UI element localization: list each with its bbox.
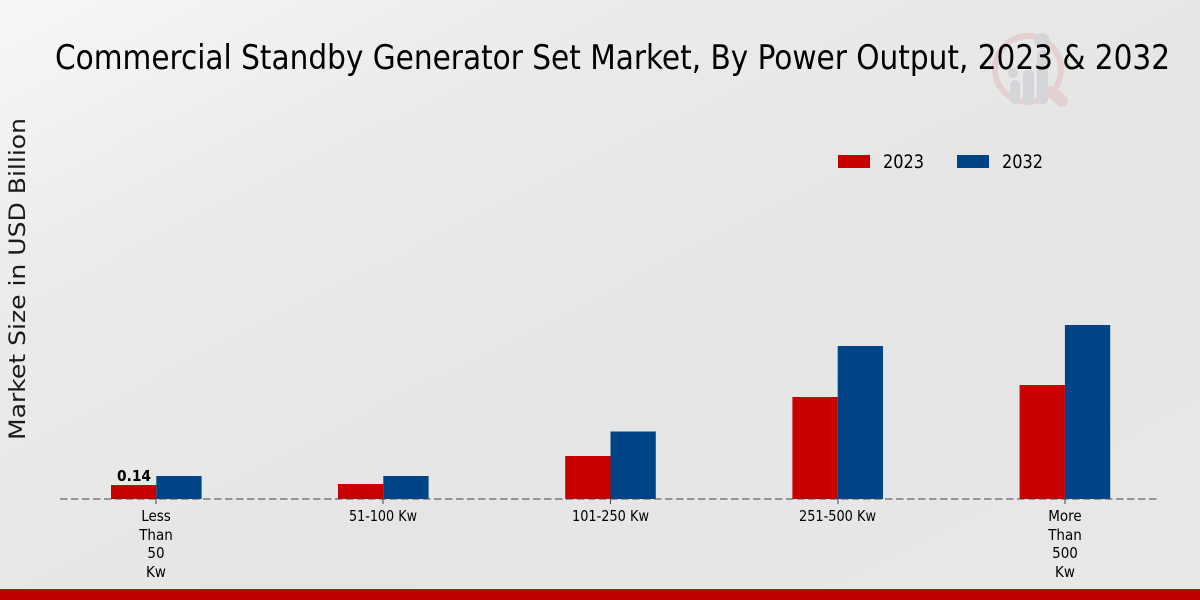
footer bar (0, 589, 1200, 600)
bars: More Than 500 Kw (1020, 325, 1110, 499)
data label: 0.14: 0.14 (117, 467, 151, 485)
icon: watermark logo (995, 33, 1062, 104)
legend label: 2032: 2032 (1002, 151, 1043, 173)
legend swatch: 2032 (957, 155, 989, 168)
label: Less Than 50 Kw: 50 (147, 544, 165, 562)
y axis label: Market Size in USD Billion (5, 118, 31, 440)
label: Less Than 50 Kw: Kw (146, 563, 166, 581)
axis baseline (60, 498, 1160, 500)
label: More Than 500 Kw: More (1048, 507, 1082, 525)
category labels (138, 507, 1082, 581)
bars: 51-100 Kw (338, 476, 429, 499)
label: 251-500 Kw: 251-500 Kw (799, 507, 876, 525)
bars: 101-250 Kw (565, 432, 656, 499)
legend label: 2023: 2023 (883, 151, 924, 173)
label: 101-250 Kw: 101-250 Kw (572, 507, 649, 525)
label: 51-100 Kw: 51-100 Kw (349, 507, 417, 525)
title: Commercial Standby Generator Set Market, By Power Output, 2023 & 2032 (55, 38, 1170, 77)
label: Less Than 50 Kw: Than (138, 526, 173, 544)
label: Less Than 50 Kw: Less (141, 507, 171, 525)
bars: Less Than 50 Kw (111, 476, 202, 499)
label: More Than 500 Kw: Than (1047, 526, 1082, 544)
axis ticks (156, 499, 1065, 504)
bar chart (60, 325, 1160, 504)
legend (838, 151, 1043, 173)
legend swatch: 2023 (838, 155, 870, 168)
bars: 251-500 Kw (792, 346, 883, 499)
label: More Than 500 Kw: Kw (1055, 563, 1075, 581)
label: More Than 500 Kw: 500 (1052, 544, 1078, 562)
